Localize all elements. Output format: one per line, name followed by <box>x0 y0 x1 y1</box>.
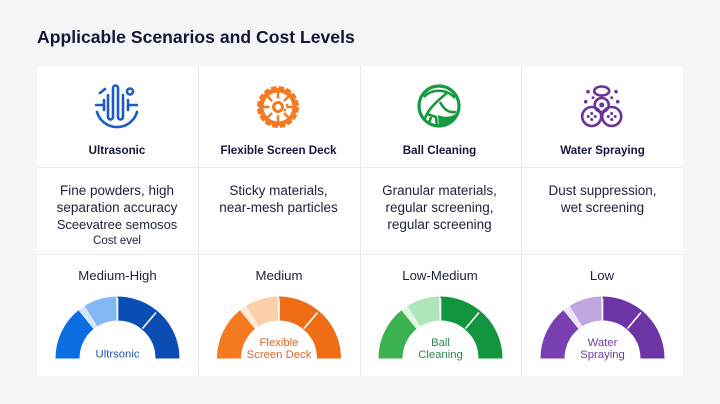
column: Ultrasonic <box>57 86 178 360</box>
text: Ball Cleaning scenarios <box>382 183 497 232</box>
text: Flexible Screen Deck scenarios: near-mesh particles <box>219 200 338 215</box>
text: Ball Cleaning scenarios: regular screening <box>387 217 492 232</box>
gauge: Ultrasonic <box>67 298 168 360</box>
text: Flexible Screen Deck scenarios <box>219 183 338 215</box>
text: Ultrasonic scenarios: Cost evel <box>93 235 141 247</box>
title: Applicable Scenarios and Cost Levels <box>37 27 355 47</box>
column: Water Spraying <box>548 86 657 361</box>
gauge: Ball Cleaning: Cleaning <box>418 349 463 361</box>
gauge: Water Spraying: Spraying <box>580 349 625 361</box>
panel: comparison table <box>37 66 683 376</box>
gauge: Flexible Screen Deck <box>229 298 329 361</box>
text: Water Spraying scenarios: wet screening <box>560 200 644 215</box>
text: Water Spraying scenarios <box>548 183 657 215</box>
icon: cleaning ball <box>419 86 459 128</box>
text: Ultrasonic scenarios <box>57 183 178 247</box>
heading: Ball Cleaning: Ball Cleaning <box>403 144 476 157</box>
text: Ball Cleaning scenarios: regular screening, <box>385 200 494 215</box>
icon: water spray nozzles <box>582 86 621 126</box>
heading: Water Spraying: Water Spraying <box>560 144 645 157</box>
text: Water Spraying scenarios: Dust suppression, <box>548 183 657 198</box>
text: Ultrasonic scenarios: Sceevatree semosos <box>57 217 177 232</box>
heading: Flexible Screen Deck: Flexible Screen Deck <box>220 144 337 157</box>
gauge: Ball Cleaning: Ball <box>431 337 450 349</box>
text: Ultrasonic scenarios: separation accuracy <box>57 200 178 215</box>
icon: flexible deck wheel <box>259 88 297 126</box>
heading: Ultrasonic: Ultrasonic <box>89 144 146 157</box>
cost level: Medium-High: Medium-High <box>78 268 157 283</box>
text: Ultrasonic scenarios: Fine powders, high <box>60 183 174 198</box>
column: Flexible Screen Deck <box>219 88 338 361</box>
gauge: Flexible Screen Deck: Flexible <box>260 337 298 349</box>
gauge: Ball Cleaning <box>390 298 490 361</box>
gauge: Flexible Screen Deck: Screen Deck <box>247 349 312 361</box>
gauge: Water Spraying: Water <box>588 337 618 349</box>
text: Flexible Screen Deck scenarios: Sticky materials, <box>229 183 328 198</box>
gauge: Water Spraying <box>552 298 652 361</box>
gauge: Ultrasonic: Ultrsonic <box>96 348 140 360</box>
icon: ultrasonic waves <box>96 86 137 127</box>
cost level: Medium: Medium <box>256 268 302 283</box>
text: Ball Cleaning scenarios: Granular materials, <box>382 183 497 198</box>
cost level: Low-Medium: Low-Medium <box>402 268 478 283</box>
cost level: Low: Low <box>590 268 615 283</box>
column: Ball Cleaning <box>382 86 497 361</box>
